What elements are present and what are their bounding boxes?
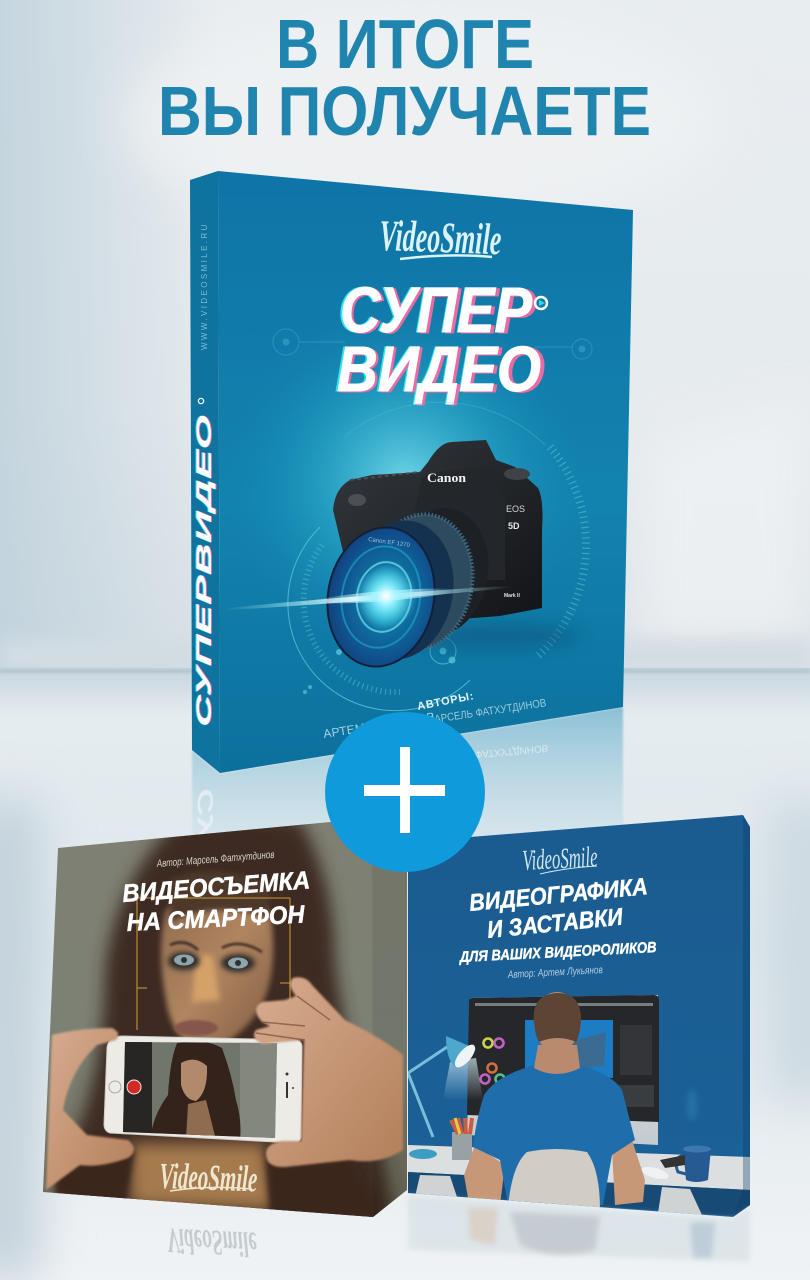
panel: main product box СУПЕРВИДЕО [190,165,640,785]
pencil cup [451,1118,472,1160]
headline: Видеосъемка на смартфон: ВИДЕОСЪЕМКА [121,866,311,908]
headline: СУПЕР ВИДЕО: СУПЕР [338,274,532,346]
logo: VideoSmile: VideoSmile [522,841,598,877]
mug and mouse [640,1146,711,1182]
man at desk [464,992,645,1210]
logo: VideoSmile [159,1156,258,1200]
camera: Canon EF 1270 [368,537,411,549]
camera label: Canon [427,470,467,485]
headline: СУПЕР ВИДЕО: ВИДЕО [335,333,541,405]
authors: АРТЕМ ЛУКЬЯНОВ [322,709,436,741]
spine shading [372,866,407,1196]
box spine [190,171,220,773]
box spine: СУПЕРВИДЕО [194,415,217,727]
desk [408,1145,750,1217]
panel: main product box reflection: СУ [193,788,218,841]
box spine: WWW.VIDEOSMILE.RU [200,224,209,350]
headline: СУПЕР ВИДЕО [335,274,547,406]
title: В ИТОГЕ [276,5,534,83]
headline: СУПЕР ВИДЕО: СУПЕР [340,274,532,346]
panel: left box Видеосъемка на смартфон [40,814,410,1265]
author line: Автор: Артем Лукьянов [507,964,603,981]
box front face [210,165,640,785]
gold focus frame [137,898,290,1030]
panel: right box Видеографика и заставки [405,810,755,1262]
logo: VideoSmile: VideoSmile [379,211,502,264]
title [158,5,651,150]
headline: Видеографика и заставки: И ЗАСТАВКИ [486,904,625,944]
headline: СУПЕР ВИДЕО: ВИДЕО [337,333,541,405]
lens flare [230,566,508,625]
phone in hands [104,1036,302,1143]
headline: Видеосъемка на смартфон [121,866,311,937]
decorative target dots [273,329,592,359]
colour wheels [480,1038,504,1084]
headline: СУПЕР ВИДЕО: СУПЕР [342,275,536,347]
authors: МАРСЕЛЬ ФАТХУТДИНОВ [426,697,547,727]
logo: VideoSmile [522,841,598,877]
monitor [467,995,659,1145]
panel: main product box reflection: ФАТХУТДИНОВ [474,742,549,759]
woman portrait [55,814,395,1220]
authors: АВТОРЫ: [416,690,475,713]
headline: Видеографика и заставки: ДЛЯ ВАШИХ ВИДЕОРОЛИКОВ [458,939,657,966]
HUD circles around camera [288,402,586,711]
headline: Видеографика и заставки [458,873,657,966]
desk lamp [408,1036,483,1159]
camera: 5D [508,521,520,531]
plus badge [325,712,485,872]
reflected logo on floor: VideoSmile [167,1220,257,1265]
box spine: СУПЕРВИДЕО [193,415,216,727]
panel: main product box reflection [192,707,623,841]
hands holding phone [46,977,403,1190]
box spine: СУПЕРВИДЕО [192,415,215,727]
title: ВЫ ПОЛУЧАЕТЕ [158,72,651,150]
headline: СУПЕР ВИДЕО: ВИДЕО [339,334,545,406]
logo: VideoSmile: VideoSmile [159,1156,258,1200]
logo: VideoSmile [382,220,501,260]
camera: Mark II [504,593,520,599]
headline: Видеосъемка на смартфон: НА СМАРТФОН [126,901,306,937]
camera: EOS [506,504,525,514]
author line: Автор: Марсель Фатхутдинов [156,849,275,870]
floor reflection of desk and chair [408,1195,750,1262]
authors [324,692,546,738]
headline: Видеографика и заставки: ВИДЕОГРАФИКА [468,873,649,917]
camera [317,440,542,675]
